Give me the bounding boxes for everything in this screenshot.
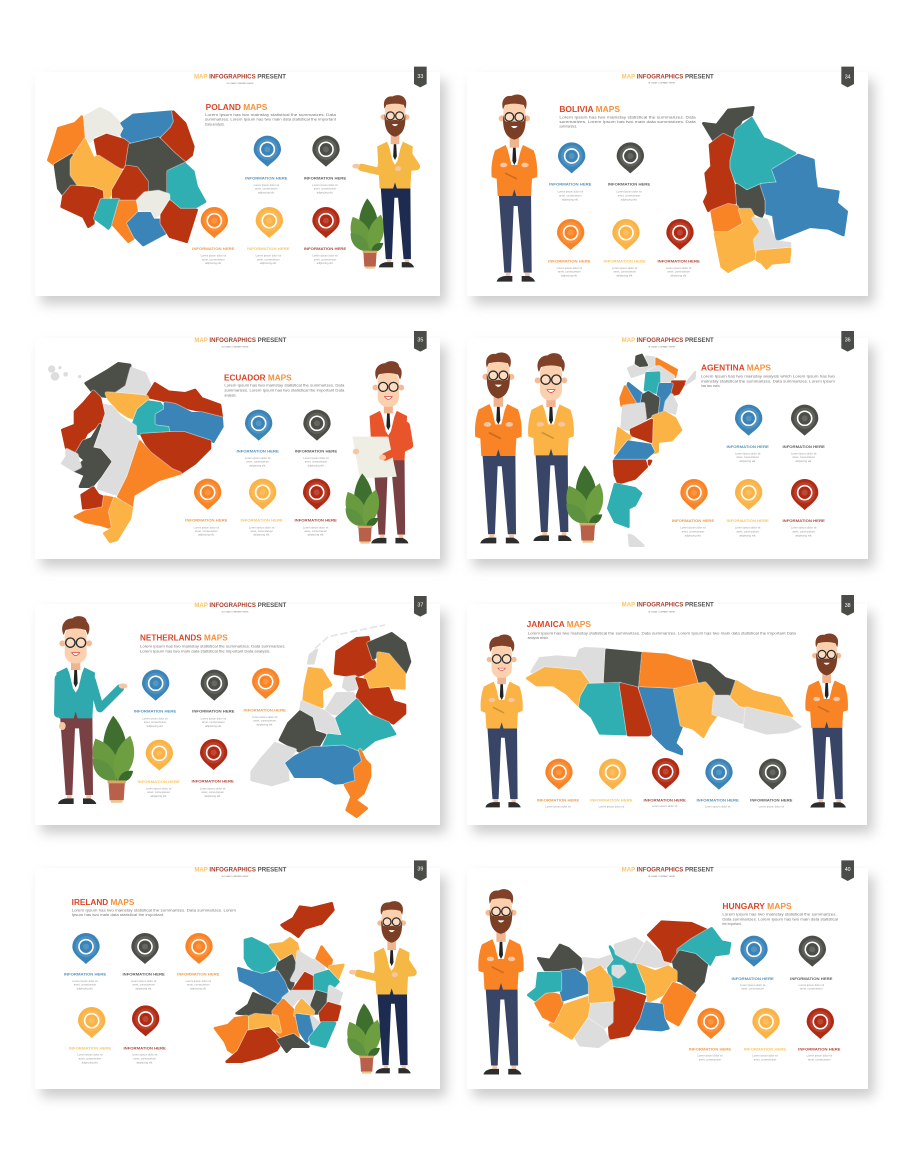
body text: analysis which.: [528, 636, 549, 640]
info item: orange: INFORMATION HERE: [548, 259, 591, 263]
page badge: [414, 331, 427, 352]
info item: yellow: INFORMATION HERE: [744, 1048, 787, 1052]
info item: dark: Lorem ipsum dolor sit: [799, 983, 824, 987]
info item: dark: INFORMATION HERE: [122, 973, 165, 977]
info item: dark: adipiscing elit.: [308, 464, 325, 468]
body text: the important.: [722, 922, 742, 926]
page badge: 40: [845, 867, 851, 873]
header: SLOGAN COMPANY HERE: [648, 875, 676, 878]
info item: yellow: adipiscing elit.: [150, 794, 167, 798]
info item: dark: adipiscing elit.: [135, 987, 152, 991]
info item: blue: INFORMATION HERE: [549, 183, 592, 187]
info item: yellow: Lorem ipsum dolor sit: [77, 1053, 103, 1057]
info item: orange: INFORMATION HERE: [192, 247, 235, 251]
figure: man with glasses pointing right: [56, 616, 127, 804]
info item: dark: Lorem ipsum dolor sit: [759, 804, 784, 808]
info item: blue: [696, 759, 739, 808]
info item: blue: amet, consectetuer: [74, 983, 96, 987]
info item: blue: INFORMATION HERE: [134, 710, 177, 714]
panel: Ireland maps: [35, 860, 446, 1097]
heading: NETHERLANDS MAPS: [140, 634, 228, 643]
info item: yellow: INFORMATION HERE: [590, 799, 633, 803]
page badge: [841, 595, 854, 616]
info item: dark: Lorem ipsum dolor sit: [791, 451, 817, 455]
info item: red: INFORMATION HERE: [798, 1048, 841, 1052]
info item: yellow: [590, 759, 633, 808]
info item: yellow: adipiscing elit.: [253, 533, 270, 537]
info item: dark: [295, 410, 338, 468]
heading: ECUADOR MAPS: [224, 373, 292, 382]
body text: [528, 631, 796, 640]
info item: orange: INFORMATION HERE: [185, 518, 228, 522]
info item: orange: [689, 1008, 732, 1061]
info item: dark: [782, 405, 825, 463]
info item: blue: [245, 136, 288, 195]
info item: blue: [236, 410, 279, 468]
info item: dark: INFORMATION HERE: [790, 977, 833, 981]
info item: red: [798, 1008, 841, 1061]
header: [194, 337, 287, 348]
info item: blue: Lorem ipsum dolor sit: [142, 716, 168, 720]
header: MAP INFOGRAPHICS PRESENT: [194, 867, 287, 874]
info item: orange: amet, consectetuer: [195, 529, 218, 533]
body text: Lorem Ipsum has two mainstay statistical the summarizes. Data summarizes.: [140, 645, 286, 649]
heading: POLAND MAPS: [206, 103, 268, 112]
info item: red: INFORMATION HERE: [304, 247, 347, 251]
heading: AGENTINA MAPS: [701, 363, 772, 372]
info item: orange: amet, consectetuer: [202, 257, 225, 261]
info item: orange: INFORMATION HERE: [672, 519, 715, 523]
info item: orange: INFORMATION HERE: [689, 1048, 732, 1052]
info item: blue: Lorem ipsum dolor sit: [705, 804, 731, 808]
info item: dark: amet, consectetuer: [792, 455, 815, 459]
figure: man with glasses arms crossed: [528, 353, 574, 541]
header: SLOGAN COMPANY HERE: [222, 345, 249, 348]
info item: dark: INFORMATION HERE: [750, 799, 793, 803]
info item: yellow: Lorem ipsum dolor sit: [599, 804, 624, 808]
info item: red: amet, consectetuer: [201, 790, 224, 794]
info item: blue: INFORMATION HERE: [245, 176, 288, 180]
page badge: [414, 67, 427, 87]
info item: red: adipiscing elit.: [317, 261, 334, 265]
info item: yellow: INFORMATION HERE: [247, 247, 290, 251]
header: SLOGAN COMPANY HERE: [222, 875, 249, 878]
info item: dark: INFORMATION HERE: [192, 710, 235, 714]
info item: blue: Lorem ipsum dolor sit: [245, 456, 271, 460]
info item: yellow: INFORMATION HERE: [603, 259, 646, 263]
info item: red: INFORMATION HERE: [191, 780, 234, 784]
info item: orange: amet, consectetuer: [699, 1057, 721, 1061]
info item: orange: [243, 668, 286, 727]
info item: red: amet, consectetuer: [808, 1057, 831, 1061]
header: SLOGAN COMPANY HERE: [648, 345, 676, 348]
info item: orange: INFORMATION HERE: [243, 708, 286, 712]
info item: yellow: INFORMATION HERE: [240, 518, 283, 522]
info item: orange: INFORMATION HERE: [177, 973, 220, 977]
plant: [340, 473, 383, 544]
info item: yellow: adipiscing elit.: [739, 533, 756, 537]
info item: red: Lorem ipsum dolor sit: [652, 804, 678, 808]
header: SLOGAN COMPANY HERE: [222, 610, 249, 613]
info item: orange: amet, consectetuer: [187, 983, 210, 987]
info item: blue: amet, consectetuer: [255, 187, 278, 191]
map: Hungary: [528, 922, 730, 1047]
page badge: 36: [845, 338, 851, 344]
figure: bearded man arms crossed: [491, 95, 537, 282]
body text: Lorem Ipsum has two mainstay analysis which Lorem Ipsum has two: [701, 374, 835, 378]
body text: mainstay statistical the summarizes. Data summarizes. Lorem Ipsum: [701, 379, 836, 383]
page badge: 39: [417, 866, 423, 872]
info item: blue: Lorem ipsum dolor sit: [558, 190, 583, 194]
info item: red: [123, 1005, 166, 1064]
info item: orange: Lorem ipsum dolor sit: [186, 979, 211, 983]
info item: dark: adipiscing elit.: [317, 191, 334, 195]
info item: dark: [750, 759, 793, 808]
heading: HUNGARY MAPS: [722, 902, 792, 911]
page badge: 33: [417, 74, 423, 80]
info item: yellow: [69, 1007, 112, 1064]
page badge: [414, 596, 427, 617]
info item: red: Lorem ipsum dolor sit: [666, 266, 692, 270]
body text: [72, 908, 237, 917]
info item: dark: adipiscing elit.: [621, 197, 638, 201]
info item: orange: amet, consectetuer: [558, 270, 581, 274]
plant: [345, 198, 388, 269]
info item: orange: adipiscing elit.: [685, 533, 702, 537]
info item: blue: Lorem ipsum dolor sit: [72, 979, 98, 983]
info item: dark: INFORMATION HERE: [295, 450, 338, 454]
figure: bearded man arms crossed: [475, 353, 522, 543]
panel: Bolivia maps: [467, 67, 874, 304]
figure: man with glasses arms crossed: [481, 635, 523, 807]
map: Ireland: [215, 903, 343, 1062]
info item: yellow: [137, 740, 180, 798]
panel: Hungary maps: [467, 860, 874, 1097]
body text: Lorem Ipsum has two mainstay statistical the summarizes. Data: [224, 384, 345, 388]
info item: red: Lorem ipsum dolor sit: [312, 254, 338, 258]
info item: dark: Lorem ipsum dolor sit: [303, 456, 329, 460]
page badge: 34: [845, 75, 851, 81]
info item: orange: amet, consectetuer: [253, 719, 276, 723]
map: Argentina: [608, 355, 695, 546]
info item: blue: [549, 142, 592, 201]
info item: orange: Lorem ipsum dolor sit: [545, 804, 571, 808]
info item: yellow: [744, 1008, 787, 1061]
info item: yellow: amet, consectetuer: [147, 790, 170, 794]
info item: dark: INFORMATION HERE: [304, 176, 347, 180]
body text: [722, 913, 838, 926]
info item: orange: adipiscing elit.: [561, 274, 578, 278]
info item: dark: Lorem ipsum dolor sit: [616, 190, 642, 194]
body text: [701, 374, 836, 388]
info item: yellow: Lorem ipsum dolor sit: [249, 525, 275, 529]
info item: dark: amet, consectetuer: [202, 720, 225, 724]
header: [194, 74, 286, 85]
info item: red: [782, 479, 825, 537]
header: [194, 602, 287, 613]
info item: red: adipiscing elit.: [670, 274, 687, 278]
info item: blue: amet, consectetuer: [246, 460, 269, 464]
body text: summarizes. Lorem Ipsum has two main data statistical the important: [205, 118, 336, 122]
page badge: [841, 331, 854, 352]
body text: Lorem Ipsum has two mainstay statistical the summarizes. Data summarizes. Lorem Ipsum has two main data statistical the important Data: [528, 631, 796, 635]
info item: blue: adipiscing elit.: [77, 987, 94, 991]
header: MAP INFOGRAPHICS PRESENT: [622, 602, 714, 609]
info item: red: Lorem ipsum dolor sit: [807, 1054, 832, 1058]
map: Poland: [48, 108, 205, 245]
info item: dark: [122, 933, 165, 991]
info item: yellow: amet, consectetuer: [257, 257, 280, 261]
info item: red: [643, 758, 686, 808]
info item: orange: Lorem ipsum dolor sit: [697, 1054, 723, 1058]
info item: yellow: amet, consectetuer: [736, 529, 759, 533]
info item: orange: adipiscing elit.: [198, 533, 215, 537]
body text: [559, 116, 696, 129]
info item: blue: amet, consectetuer: [741, 987, 764, 991]
info item: orange: [192, 207, 235, 265]
info item: dark: adipiscing elit.: [205, 724, 222, 728]
plant: [341, 1003, 385, 1074]
info item: yellow: [247, 207, 290, 265]
info item: yellow: amet, consectetuer: [79, 1056, 101, 1060]
page badge: 38: [845, 603, 851, 609]
page badge: [841, 860, 854, 881]
header: MAP INFOGRAPHICS PRESENT: [622, 337, 714, 344]
body text: analysis.: [224, 393, 237, 397]
body text: Lorem Ipsum has two mainstay statistical the summarizes. Data: [205, 113, 336, 117]
info item: red: amet, consectetuer: [314, 257, 336, 261]
info item: dark: amet, consectetuer: [314, 187, 336, 191]
info item: yellow: Lorem ipsum dolor sit: [752, 1054, 778, 1058]
info item: blue: adipiscing elit.: [147, 724, 164, 728]
info item: dark: [790, 936, 833, 991]
info item: red: adipiscing elit.: [307, 533, 324, 537]
body text: Ipsum has two main data statistical the important.: [72, 913, 164, 917]
heading: JAMAICA MAPS: [527, 620, 592, 629]
info item: blue: amet, consectetuer: [736, 455, 759, 459]
info item: yellow: adipiscing elit.: [82, 1060, 99, 1064]
info item: yellow: adipiscing elit.: [616, 274, 633, 278]
body text: Lorem Ipsum has two mainstay statistical the summarizes. Data summarizes. Lorem: [72, 908, 237, 912]
panel: Poland maps: [35, 67, 446, 304]
info item: blue: adipiscing elit.: [258, 191, 275, 195]
info item: red: amet, consectetuer: [304, 529, 327, 533]
info item: red: adipiscing elit.: [795, 533, 812, 537]
info item: blue: Lorem ipsum dolor sit: [735, 451, 761, 455]
info item: dark: amet, consectetuer: [800, 987, 823, 991]
panel: Jamaica maps: [467, 595, 873, 833]
info item: orange: Lorem ipsum dolor sit: [252, 715, 278, 719]
figure: bearded man arms crossed: [805, 633, 848, 808]
body text: [224, 384, 345, 397]
header: SLOGAN COMPANY HERE: [648, 82, 676, 85]
info item: red: [191, 739, 234, 798]
header: MAP INFOGRAPHICS PRESENT: [194, 602, 287, 609]
map: Jamaica: [527, 648, 800, 754]
info item: yellow: Lorem ipsum dolor sit: [146, 786, 172, 790]
info item: orange: adipiscing elit.: [190, 987, 207, 991]
body text: Lorem Ipsum has two main data statistical the important Data analysis.: [140, 649, 271, 653]
info item: yellow: amet, consectetuer: [250, 529, 273, 533]
info item: yellow: INFORMATION HERE: [726, 519, 769, 523]
info item: orange: [185, 479, 228, 537]
info item: red: [304, 207, 347, 265]
info item: red: [294, 479, 337, 537]
heading: BOLIVIA MAPS: [559, 105, 621, 114]
page badge: [414, 860, 427, 881]
info item: yellow: [726, 479, 769, 537]
info item: dark: [192, 670, 235, 728]
info item: yellow: Lorem ipsum dolor sit: [735, 526, 761, 530]
info item: dark: amet, consectetuer: [305, 460, 327, 464]
info item: dark: INFORMATION HERE: [782, 445, 825, 449]
info item: orange: Lorem ipsum dolor sit: [201, 254, 226, 258]
page badge: 37: [417, 603, 423, 609]
header: [622, 602, 714, 613]
info item: blue: amet, consectetuer: [559, 193, 582, 197]
info item: orange: adipiscing elit.: [256, 723, 273, 727]
header: [622, 337, 714, 348]
header: [622, 867, 714, 878]
body text: [205, 113, 336, 127]
page badge: 35: [417, 338, 423, 344]
info item: yellow: adipiscing elit.: [260, 261, 277, 265]
info item: blue: adipiscing elit.: [249, 464, 266, 468]
info item: red: Lorem ipsum dolor sit: [132, 1053, 158, 1057]
info item: dark: [608, 142, 651, 201]
info item: orange: INFORMATION HERE: [537, 799, 580, 803]
header: MAP INFOGRAPHICS PRESENT: [194, 74, 286, 81]
info item: red: INFORMATION HERE: [643, 798, 686, 802]
info item: red: adipiscing elit.: [136, 1060, 153, 1064]
info item: orange: adipiscing elit.: [205, 261, 222, 265]
info item: red: amet, consectetuer: [133, 1056, 156, 1060]
figure: bearded man pointing: [349, 901, 413, 1073]
info item: blue: [134, 670, 177, 728]
header: SLOGAN COMPANY HERE: [648, 610, 676, 613]
body text: summarizes.: [559, 125, 577, 129]
info item: red: amet, consectetuer: [792, 529, 815, 533]
info item: blue: INFORMATION HERE: [726, 445, 769, 449]
info item: red: Lorem ipsum dolor sit: [303, 525, 329, 529]
header: MAP INFOGRAPHICS PRESENT: [622, 73, 714, 80]
body text: summarizes. Lorem Ipsum has two statistical the important Data: [224, 389, 345, 393]
info item: orange: amet, consectetuer: [682, 529, 704, 533]
page badge: [841, 67, 854, 87]
info item: dark: adipiscing elit.: [795, 459, 812, 463]
panel: Ecuador maps: [35, 331, 446, 567]
info item: dark: Lorem ipsum dolor sit: [131, 979, 157, 983]
info item: orange: [672, 479, 715, 537]
info item: blue: [64, 933, 107, 991]
header: SLOGAN COMPANY HERE: [227, 82, 254, 85]
info item: red: adipiscing elit.: [204, 794, 221, 798]
info item: red: INFORMATION HERE: [782, 519, 825, 523]
map: Netherlands: [252, 625, 410, 817]
info item: red: Lorem ipsum dolor sit: [200, 786, 226, 790]
heading: IRELAND MAPS: [72, 898, 135, 907]
figure: bearded man pointing: [352, 95, 416, 267]
body text: Data summarizes. Lorem Ipsum has two main data statistical: [722, 917, 838, 921]
panel: Netherlands maps: [35, 596, 446, 833]
body text: has two main.: [701, 384, 721, 388]
map: Bolivia: [703, 107, 847, 272]
info item: orange: Lorem ipsum dolor sit: [194, 525, 219, 529]
header: [622, 73, 714, 85]
body text: Lorem Ipsum has two mainstay statistical the summarizes.: [722, 913, 837, 917]
info item: blue: INFORMATION HERE: [64, 973, 107, 977]
info item: yellow: [240, 479, 283, 537]
info item: blue: amet, consectetuer: [144, 720, 166, 724]
info item: dark: Lorem ipsum dolor sit: [312, 183, 338, 187]
info item: yellow: INFORMATION HERE: [69, 1046, 112, 1050]
info item: yellow: amet, consectetuer: [613, 270, 636, 274]
body text: Data analysis.: [205, 123, 225, 127]
info item: red: INFORMATION HERE: [294, 518, 337, 522]
info item: blue: [726, 405, 769, 463]
header: [194, 867, 287, 878]
info item: blue: INFORMATION HERE: [731, 977, 774, 981]
info item: dark: INFORMATION HERE: [608, 183, 651, 187]
info item: yellow: INFORMATION HERE: [137, 780, 180, 784]
info item: blue: adipiscing elit.: [562, 197, 579, 201]
info item: blue: INFORMATION HERE: [236, 450, 279, 454]
info item: blue: INFORMATION HERE: [696, 799, 739, 803]
info item: blue: adipiscing elit.: [739, 459, 756, 463]
info item: red: INFORMATION HERE: [657, 259, 700, 263]
info item: orange: [548, 219, 591, 278]
info item: blue: [731, 936, 774, 991]
header: MAP INFOGRAPHICS PRESENT: [194, 337, 287, 344]
info item: dark: amet, consectetuer: [618, 193, 640, 197]
info item: dark: [304, 136, 347, 195]
info item: orange: [537, 759, 580, 808]
map: Ecuador: [48, 363, 222, 542]
plant: [85, 715, 139, 803]
info item: yellow: Lorem ipsum dolor sit: [256, 254, 281, 258]
figure: man with glasses holding paper: [352, 361, 409, 543]
info item: red: INFORMATION HERE: [123, 1046, 166, 1050]
info item: yellow: [603, 219, 646, 278]
plant: [560, 465, 608, 543]
info item: yellow: amet, consectetuer: [754, 1057, 776, 1061]
info item: orange: Lorem ipsum dolor sit: [680, 526, 706, 530]
body text: summarizes. Lorem Ipsum has two main data summarizes. Data: [559, 120, 696, 124]
info item: red: [657, 219, 700, 278]
header: MAP INFOGRAPHICS PRESENT: [622, 867, 714, 874]
info item: red: Lorem ipsum dolor sit: [791, 526, 817, 530]
body text: [140, 645, 286, 653]
info item: dark: amet, consectetuer: [132, 983, 155, 987]
body text: Lorem Ipsum has two mainstay statistical the summarizes. Data: [559, 116, 696, 120]
panel: Argentina maps: [467, 331, 874, 567]
info item: blue: Lorem ipsum dolor sit: [740, 983, 766, 987]
figure: bearded man arms crossed: [478, 889, 524, 1074]
info item: orange: [177, 933, 220, 991]
info item: orange: Lorem ipsum dolor sit: [557, 266, 582, 270]
info item: blue: Lorem ipsum dolor sit: [254, 183, 279, 187]
info item: dark: Lorem ipsum dolor sit: [201, 716, 226, 720]
info item: red: amet, consectetuer: [667, 270, 690, 274]
info item: yellow: Lorem ipsum dolor sit: [612, 266, 638, 270]
